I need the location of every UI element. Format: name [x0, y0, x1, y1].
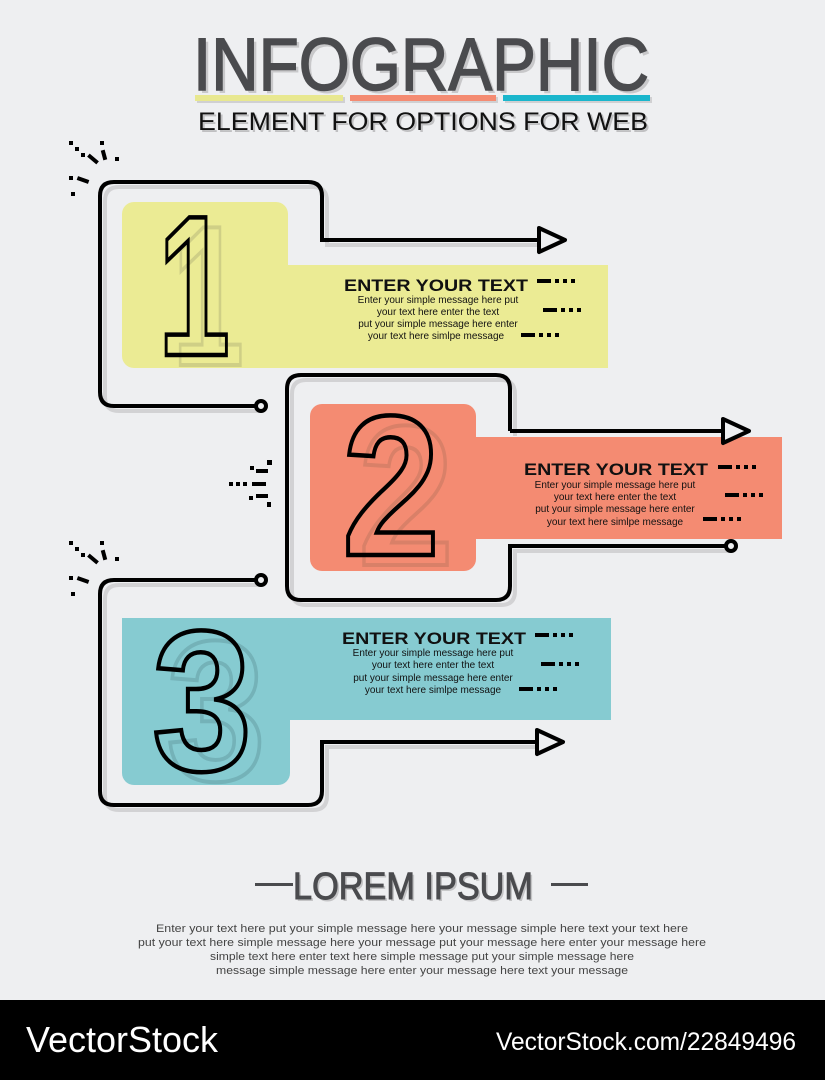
text block 2: ENTER YOUR TEXT — [524, 460, 709, 479]
text block 1: put your simple message here enter — [358, 319, 518, 330]
text block 2: put your simple message here enter — [535, 504, 695, 515]
heading: lorem ipsum: LOREM IPSUM — [293, 866, 533, 908]
footer bar — [0, 1000, 825, 1080]
connector lines shadows — [105, 187, 731, 810]
number 2: 2 — [358, 385, 454, 608]
connector line 3 with arrow — [100, 575, 563, 805]
heading: lorem ipsum: LOREM IPSUM — [295, 868, 535, 910]
dash marks 2 — [703, 465, 763, 521]
number 1: 1 — [172, 185, 244, 408]
footer bar: VectorStock — [26, 1019, 219, 1060]
footer bar: VectorStock.com/22849496 — [496, 1028, 796, 1056]
burst marks — [69, 141, 272, 596]
body text block: message simple message here enter your message here text your message — [216, 965, 628, 977]
panel 3: blue — [122, 590, 611, 823]
dash marks 1 — [521, 279, 581, 337]
title: INFOGRAPHIC — [193, 23, 649, 106]
text block 2 — [524, 460, 709, 528]
text block 3: put your simple message here enter — [353, 673, 513, 684]
text block 3 — [342, 629, 527, 696]
colored underline bars — [195, 95, 652, 103]
body text block: Enter your text here put your simple message here your message simple here text your text here — [156, 923, 688, 935]
text block 1 — [344, 276, 529, 342]
text block 3: Enter your simple message here put — [353, 648, 514, 659]
text block 1: ENTER YOUR TEXT — [344, 276, 529, 295]
text block 3: your text here simlpe message — [365, 685, 502, 696]
body text block: put your text here simple message here your message put your message here enter your message here — [138, 937, 706, 949]
dash marks 3 — [519, 633, 579, 691]
text block 3: ENTER YOUR TEXT — [342, 629, 527, 648]
text block 1: your text here enter the text — [377, 307, 499, 318]
text block 2: your text here simlpe message — [547, 517, 684, 528]
text block 1: your text here simlpe message — [368, 331, 505, 342]
panel 1: yellow — [122, 175, 608, 408]
body text block: simple text here enter text here simple message put your simple message here — [210, 951, 634, 963]
number 2: 2 — [342, 375, 440, 598]
body text block — [138, 923, 706, 977]
subtitle: ELEMENT FOR OPTIONS FOR WEB — [200, 110, 650, 138]
number 1: 1 — [158, 175, 230, 398]
text block 2: Enter your simple message here put — [535, 480, 696, 491]
text block 2: your text here enter the text — [554, 492, 676, 503]
title: INFOGRAPHIC — [196, 26, 652, 109]
text block 3: your text here enter the text — [372, 660, 494, 671]
number 3: 3 — [152, 590, 252, 813]
subtitle: ELEMENT FOR OPTIONS FOR WEB — [198, 108, 648, 136]
text block 1: Enter your simple message here put — [358, 295, 519, 306]
number 3: 3 — [166, 600, 266, 823]
panel 2: salmon — [310, 375, 782, 608]
connector line 1 with arrow — [100, 182, 565, 411]
connector line 2 with arrow — [287, 375, 749, 600]
